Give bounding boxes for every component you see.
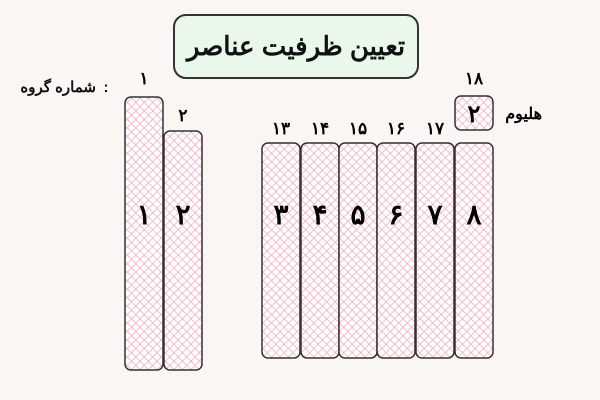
column: group 2 bbox=[164, 106, 202, 370]
columns: groups 13-18: ۳ bbox=[273, 199, 289, 230]
columns: groups 13-18: ۱۶ bbox=[387, 119, 405, 138]
columns: groups 13-18: ۶ bbox=[388, 199, 404, 230]
columns: groups 13-18: ۱۵ bbox=[349, 119, 367, 138]
title: تعیین ظرفیت عناصر bbox=[185, 31, 405, 62]
column: group 2: ۲ bbox=[175, 199, 191, 230]
column: group 2: ۲ bbox=[178, 106, 188, 125]
column: group 1 bbox=[125, 69, 163, 370]
columns: groups 13-18: ۷ bbox=[427, 199, 443, 230]
label: group number: : bbox=[104, 79, 108, 96]
columns: groups 13-18: ۱۴ bbox=[311, 119, 329, 138]
columns: groups 13-18 bbox=[262, 119, 493, 358]
helium box: هلیوم bbox=[505, 106, 542, 124]
label: group number: شماره گروه bbox=[20, 78, 96, 96]
columns: groups 13-18: ۵ bbox=[350, 199, 366, 230]
title bbox=[174, 15, 418, 78]
columns: groups 13-18: ۴ bbox=[312, 199, 328, 230]
columns: groups 13-18: ۸ bbox=[466, 199, 482, 230]
helium box: ۲ bbox=[468, 101, 481, 128]
helium box bbox=[455, 69, 542, 130]
columns: groups 13-18: ۱۳ bbox=[272, 119, 290, 138]
column: group 1: ۱ bbox=[136, 199, 152, 230]
columns: groups 13-18: ۱۷ bbox=[426, 119, 445, 138]
column: group 1: ۱ bbox=[139, 69, 149, 88]
helium box: ۱۸ bbox=[465, 69, 484, 88]
